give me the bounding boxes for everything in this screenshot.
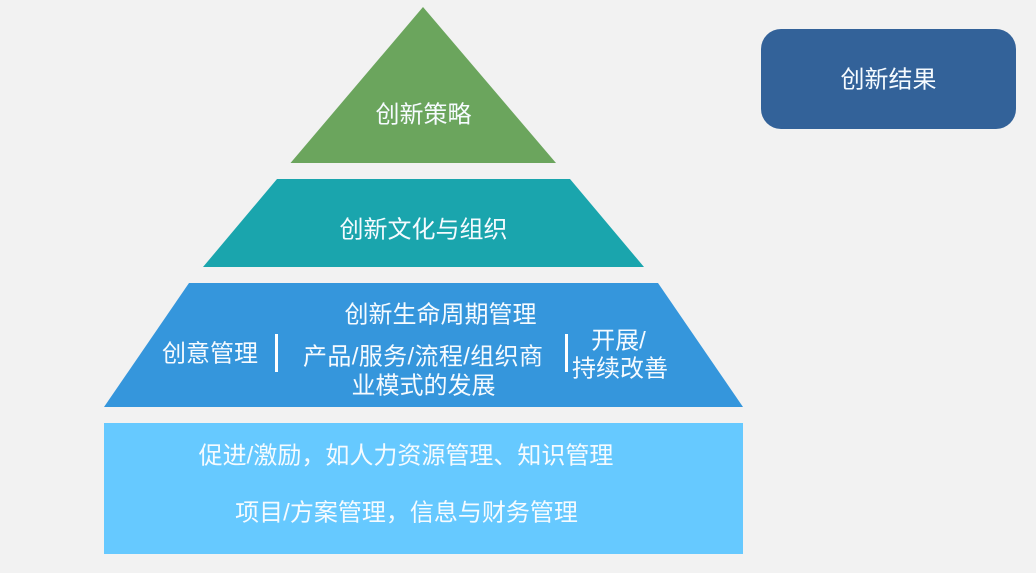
pyramid tier 1: innovation strategy bbox=[290, 7, 556, 163]
innovation results box bbox=[761, 29, 1016, 129]
product and service development label bbox=[303, 344, 543, 400]
product and service development label: 产品/服务/流程/组织商 bbox=[303, 344, 543, 370]
pyramid tier 1: innovation strategy: 创新策略 bbox=[376, 102, 472, 128]
continuous improvement label bbox=[572, 328, 668, 382]
base text line 2: 项目/方案管理，信息与财务管理 bbox=[235, 500, 578, 526]
base text line 1: 促进/激励，如人力资源管理、知识管理 bbox=[199, 442, 613, 470]
tier 3 heading: 创新生命周期管理 bbox=[344, 302, 536, 328]
innovation results box: 创新结果 bbox=[840, 66, 936, 94]
divider right bbox=[565, 334, 568, 372]
product and service development label: 业模式的发展 bbox=[352, 372, 496, 400]
continuous improvement label: 持续改善 bbox=[572, 356, 668, 382]
idea management label: 创意管理 bbox=[162, 340, 258, 368]
pyramid base: supporting management bbox=[104, 423, 743, 554]
pyramid tier 3: innovation lifecycle management bbox=[104, 283, 743, 407]
pyramid tier 2: innovation culture and organization: 创新文化与组织 bbox=[340, 216, 508, 244]
pyramid tier 2: innovation culture and organization bbox=[203, 179, 644, 267]
continuous improvement label: 开展/ bbox=[591, 328, 646, 354]
divider left bbox=[275, 334, 278, 372]
